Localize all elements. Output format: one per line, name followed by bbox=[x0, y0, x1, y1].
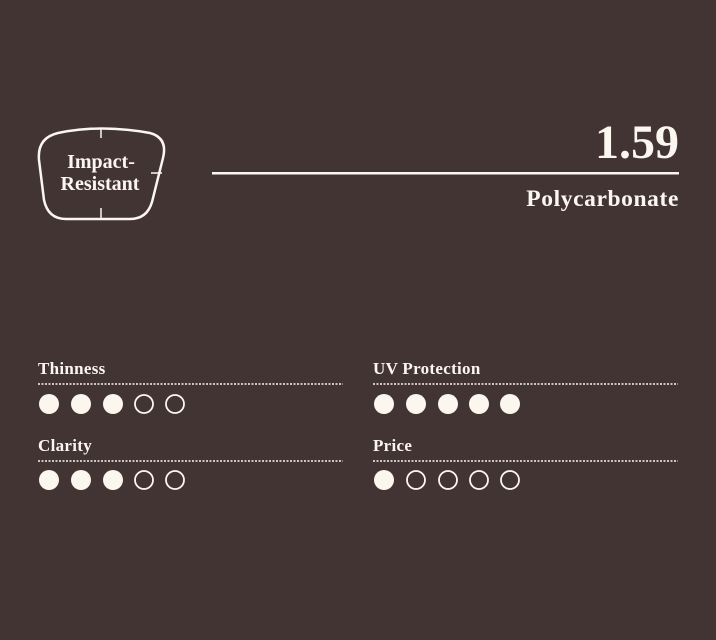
icon: lens badge bbox=[39, 128, 164, 219]
icon: lens badge: Impact- bbox=[67, 151, 135, 173]
rating: thinness bbox=[38, 359, 343, 414]
rating: price bbox=[373, 436, 678, 490]
rating: UV protection: UV Protection bbox=[373, 359, 481, 378]
rating: clarity: Clarity bbox=[38, 436, 92, 455]
rating: clarity bbox=[38, 436, 343, 490]
subtitle: material: Polycarbonate bbox=[526, 186, 679, 212]
rating: thinness: Thinness bbox=[38, 359, 106, 378]
rating: price: Price bbox=[373, 436, 412, 455]
divider rule bbox=[212, 172, 679, 174]
title: index number: 1.59 bbox=[595, 116, 679, 169]
rating: UV protection bbox=[373, 359, 678, 414]
icon: lens badge: Resistant bbox=[61, 173, 140, 195]
